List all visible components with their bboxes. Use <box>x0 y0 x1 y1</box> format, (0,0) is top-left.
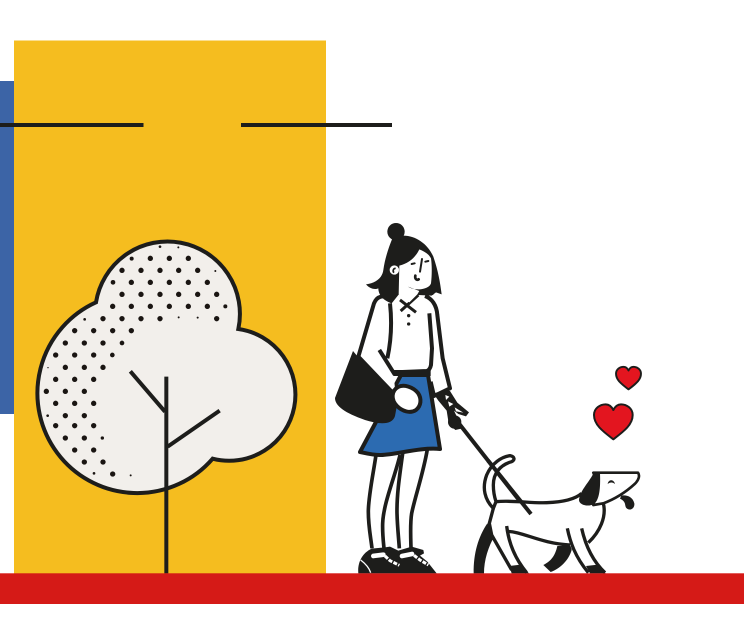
far front leg <box>543 546 572 572</box>
line: left horizontal bar <box>0 123 144 127</box>
figure: dog <box>474 456 639 573</box>
waistband <box>394 370 431 376</box>
icon: large heart <box>594 404 633 439</box>
hair <box>366 236 442 303</box>
ear <box>390 265 399 275</box>
panel: yellow background block <box>14 40 326 574</box>
far hind leg <box>474 523 495 573</box>
dog eye <box>608 480 615 484</box>
face <box>399 249 432 302</box>
line: right horizontal bar <box>241 123 392 127</box>
bag <box>335 351 397 423</box>
facial features <box>412 259 428 280</box>
leash over dog <box>488 460 531 514</box>
dog leash <box>457 421 530 514</box>
panel: blue side strip <box>0 81 14 414</box>
left hand <box>393 386 420 412</box>
ground: red band <box>0 573 744 604</box>
collar <box>400 295 418 312</box>
head <box>366 223 442 303</box>
ear detail <box>393 268 396 273</box>
dog ear <box>579 472 600 506</box>
icon: tree <box>37 241 295 573</box>
shoes <box>358 547 437 573</box>
tree trunk and branches <box>130 371 220 573</box>
legs <box>368 449 427 548</box>
tree shading dots <box>44 245 227 477</box>
hair bun <box>387 223 405 240</box>
paws <box>509 565 606 573</box>
tail <box>484 456 514 508</box>
torso and arms <box>358 295 451 396</box>
dog tongue <box>620 495 634 510</box>
chin shadow <box>408 284 433 295</box>
skirt <box>360 375 440 455</box>
figure: woman <box>335 223 530 573</box>
dog outline <box>489 493 605 573</box>
buttons <box>407 314 410 326</box>
dog head <box>593 473 639 505</box>
right hand with cuff <box>433 391 469 430</box>
icon: small heart <box>616 367 641 389</box>
dog body <box>489 493 605 573</box>
